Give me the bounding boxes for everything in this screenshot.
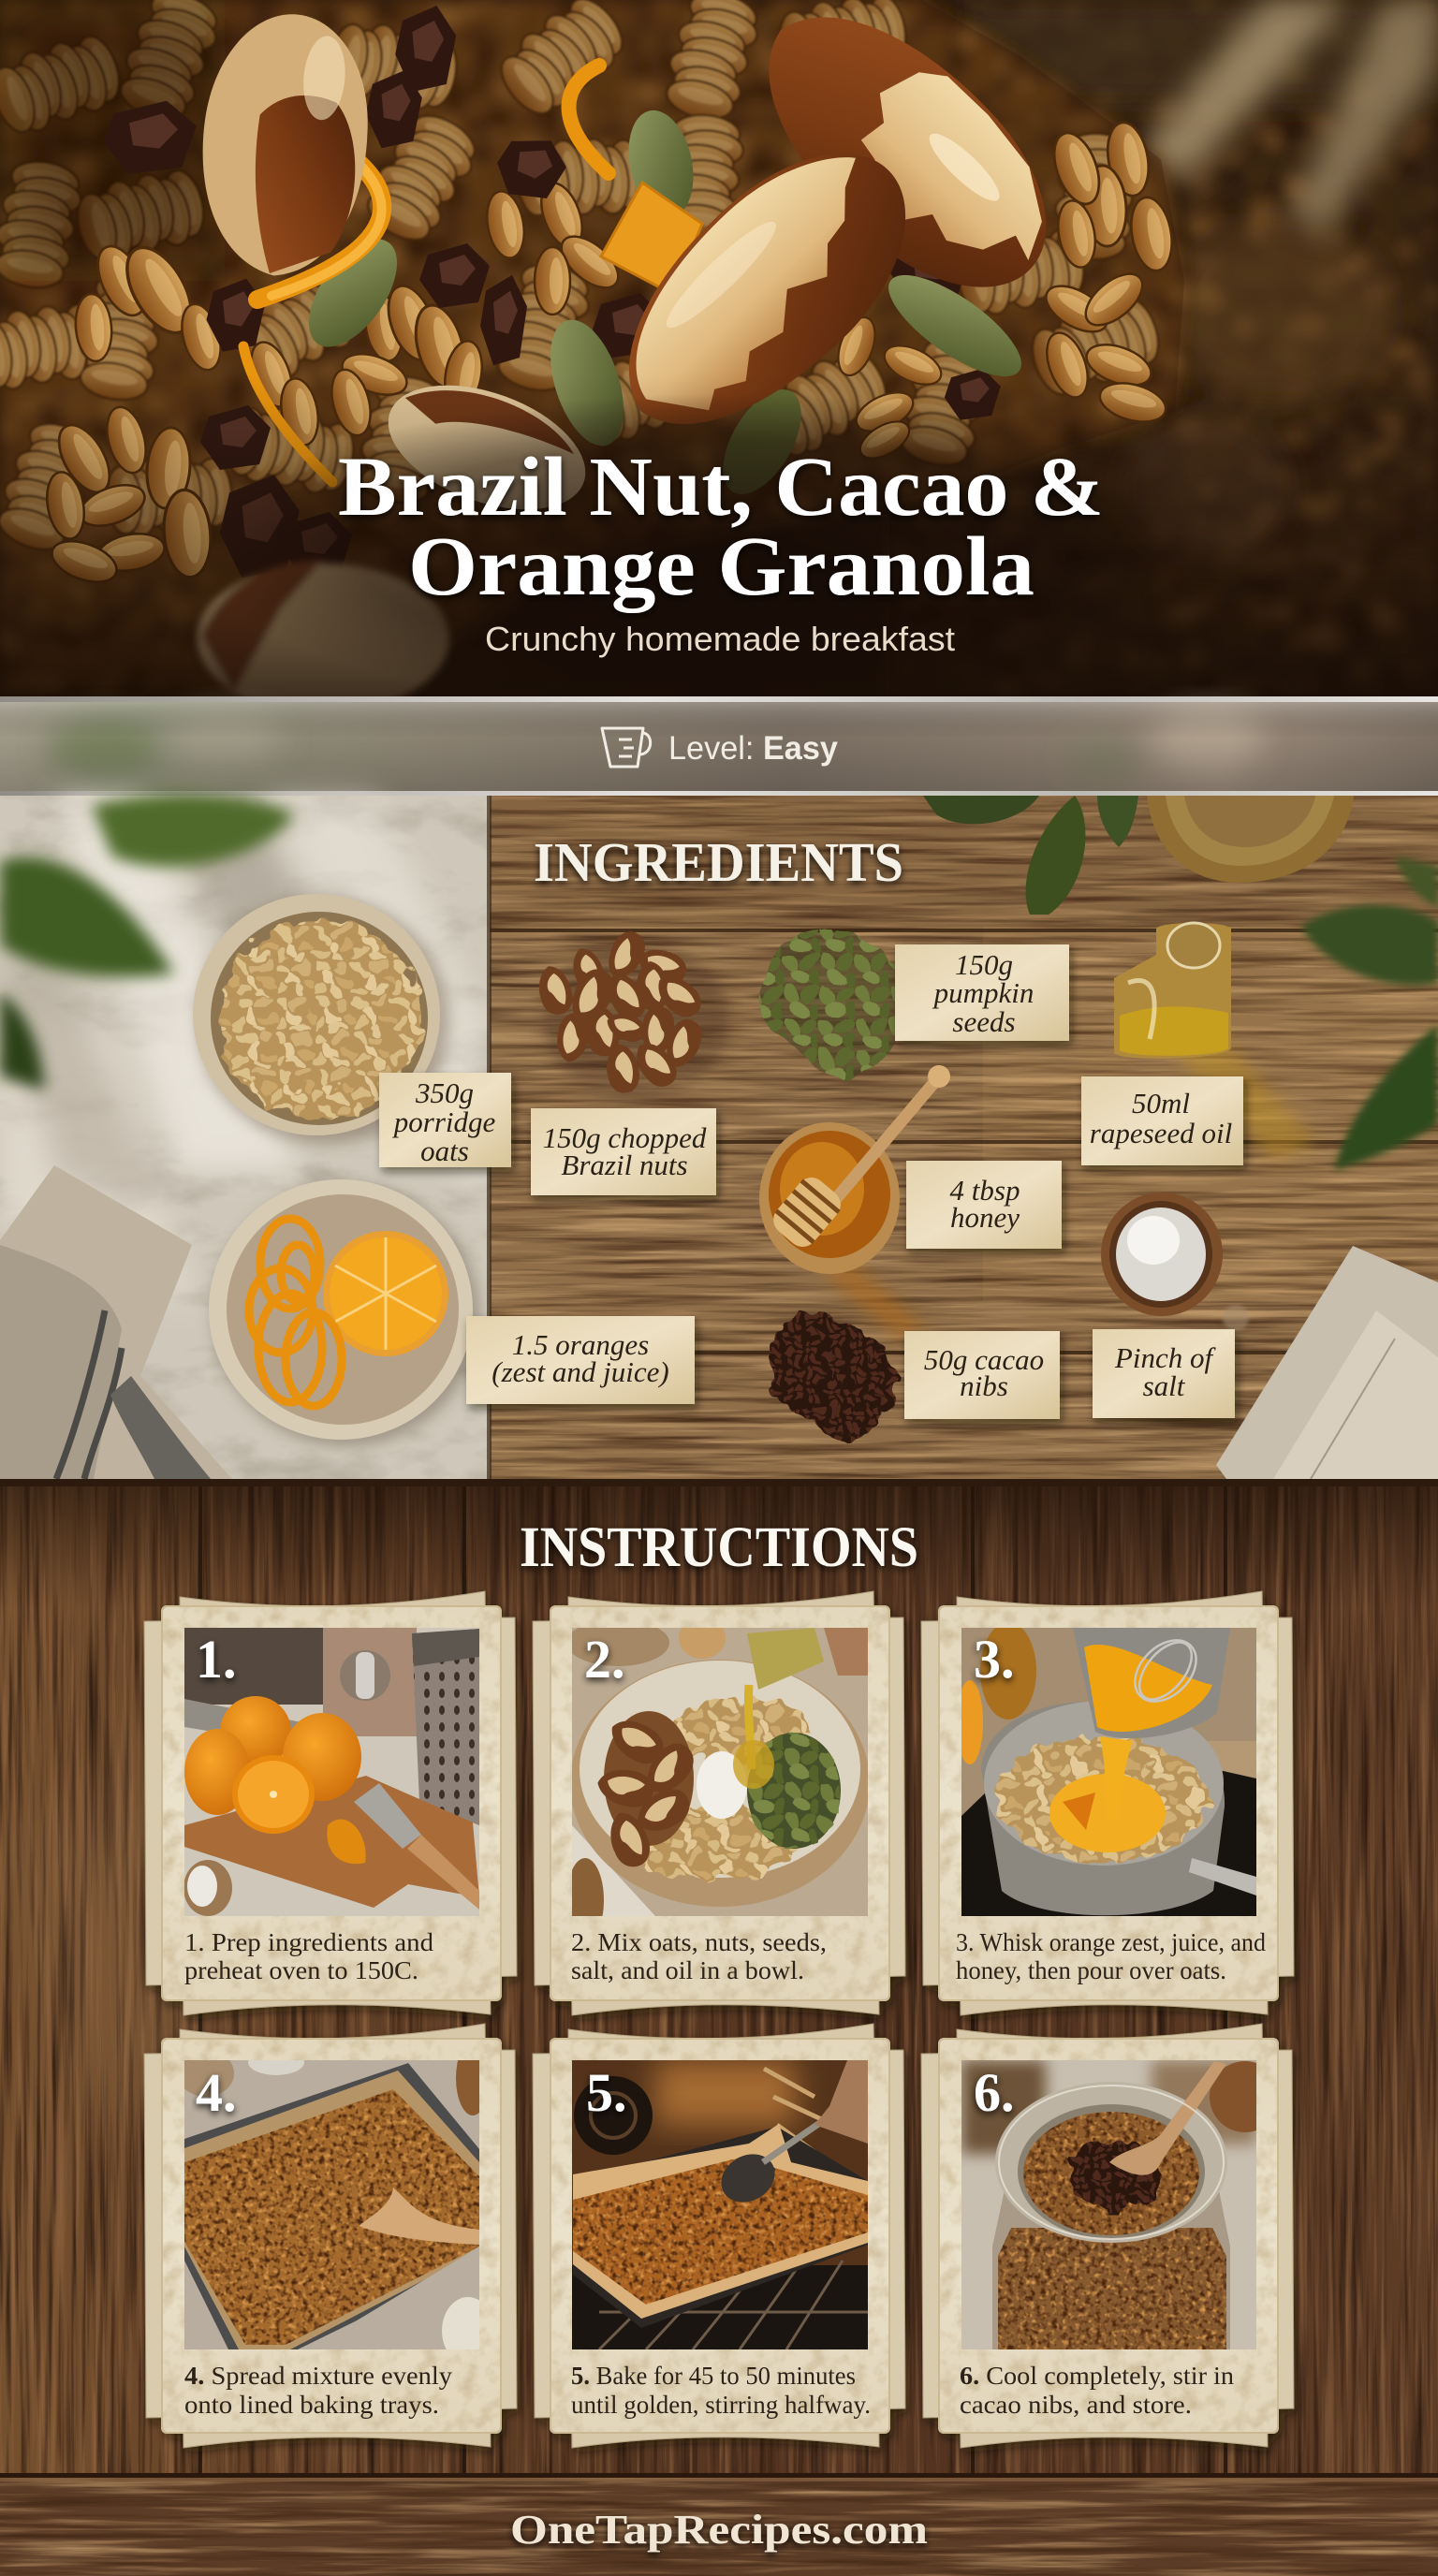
orange zest rings [249, 1219, 342, 1406]
pile of pumpkin seeds [760, 927, 908, 1078]
title: Orange Granola [408, 520, 1034, 613]
photo: saucepan and orange mixture [961, 1628, 1256, 1916]
caption 5: 5. Bake for 45 to 50 minutes [571, 2362, 856, 2390]
panel: ingredients [0, 795, 1438, 1479]
panel: hero photo [0, 0, 1438, 713]
blurred leaves, left [0, 795, 294, 1090]
label: oranges: (zest and juice) [492, 1355, 669, 1388]
bowl of orange and zest [209, 1179, 479, 1446]
large Brazil nut, left [192, 7, 377, 283]
wood background [0, 1479, 1438, 2475]
card: step 6: cacao nibs, and store. [960, 2391, 1192, 2419]
card: step 6 [921, 2024, 1294, 2448]
label: porridge oats: 350g [415, 1076, 474, 1109]
caption 6: 6. Cool completely, stir in [960, 2362, 1235, 2390]
caption 2: 2. Mix oats, nuts, seeds, [571, 1928, 827, 1956]
card: step 1: preheat oven to 150C. [184, 1956, 418, 1984]
caption 3: 3. Whisk orange zest, juice, and [956, 1928, 1266, 1956]
label: salt [1093, 1329, 1235, 1418]
label: pumpkin seeds: 150g [955, 948, 1013, 981]
linen towel, right [1216, 1246, 1438, 1479]
number 4: 4. [196, 2062, 236, 2123]
number 1: 1. [196, 1629, 236, 1690]
label: salt: Pinch of [1114, 1341, 1216, 1374]
honey dipper [768, 1065, 950, 1253]
pumpkin seeds [291, 104, 1035, 507]
number 6: 6. [974, 2062, 1015, 2123]
label: cacao nibs: 50g cacao [924, 1343, 1044, 1376]
bottle of rapeseed oil [1114, 923, 1315, 1161]
label: honey: 4 tbsp [950, 1174, 1020, 1207]
label: cacao nibs [904, 1331, 1060, 1419]
label: porridge oats: porridge [392, 1105, 495, 1138]
large Brazil nut, centre [580, 109, 950, 475]
title: Brazil Nut, Cacao & [338, 441, 1104, 534]
photo: baking tray [184, 2060, 479, 2349]
label: porridge oats: oats [420, 1134, 469, 1167]
caption 1: 1. Prep ingredients and [184, 1928, 434, 1956]
label: pumpkin seeds [895, 944, 1069, 1041]
card: step 2: salt, and oil in a bowl. [571, 1956, 804, 1984]
label: salt: salt [1143, 1369, 1186, 1402]
card: step 3 [921, 1591, 1294, 2015]
label: oranges [466, 1316, 695, 1404]
photo: jar of granola [961, 2060, 1256, 2349]
wood table [490, 796, 1438, 1479]
label: oranges: 1.5 oranges [512, 1328, 649, 1361]
subtitle: Crunchy homemade breakfast [485, 620, 955, 658]
label: Brazil nuts: 150g chopped [543, 1121, 707, 1154]
caption 4: 4. Spread mixture evenly [184, 2362, 453, 2390]
label: pumpkin seeds: seeds [952, 1005, 1016, 1038]
label: honey [906, 1161, 1062, 1249]
label: rapeseed oil: rapeseed oil [1090, 1117, 1232, 1149]
photo: mixing bowl [572, 1628, 868, 1916]
label: Brazil nuts [531, 1108, 716, 1195]
footer plank [0, 2473, 1438, 2576]
small Brazil nuts, bottom [197, 361, 602, 713]
jar of honey with dipper [759, 1065, 950, 1339]
photo: tray in oven [572, 2060, 868, 2349]
card: step 2 [533, 1591, 905, 2015]
number 3: 3. [974, 1629, 1015, 1690]
card: step 5: until golden, stirring halfway. [571, 2391, 871, 2419]
label: honey: honey [950, 1201, 1020, 1234]
level text: Level: Easy [668, 730, 839, 767]
card: step 4 [144, 2024, 517, 2448]
title [338, 441, 1104, 613]
card: step 3: honey, then pour over oats. [956, 1956, 1226, 1984]
label: porridge oats [379, 1073, 511, 1167]
icon: measuring jug [602, 728, 651, 767]
pile of Brazil nuts [534, 927, 730, 1100]
bowl of salt [1101, 1193, 1249, 1331]
in-focus granola mass [0, 0, 1184, 696]
number 5: 5. [586, 2062, 627, 2123]
label: pumpkin seeds: pumpkin [932, 976, 1034, 1009]
glass jar and leaves, top [923, 796, 1354, 915]
panel: level band [0, 696, 1438, 796]
packed oat stacks, background layer [0, 0, 1167, 559]
bowl of oats [193, 894, 449, 1144]
label: Brazil nuts: Brazil nuts [561, 1149, 688, 1181]
cacao nibs [103, 6, 1001, 578]
footer text: OneTapRecipes.com [510, 2507, 928, 2553]
card: step 4: onto lined baking trays. [184, 2391, 439, 2419]
granola oat clusters [42, 119, 1177, 590]
marble counter [0, 796, 490, 1479]
hero darkening gradient [0, 374, 1438, 696]
card: step 1 [144, 1591, 517, 2015]
linen towel, left [0, 1165, 232, 1479]
orange zest curls [243, 66, 609, 482]
heading: instructions: INSTRUCTIONS [520, 1516, 918, 1579]
pile of cacao nibs [768, 1312, 897, 1442]
orange slice [323, 1231, 448, 1356]
background: blurred granola bokeh [889, 0, 1438, 696]
label: rapeseed oil [1081, 1076, 1243, 1165]
candied orange piece [601, 183, 702, 295]
panel: instructions [0, 1479, 1438, 2475]
label: rapeseed oil: 50ml [1132, 1087, 1190, 1120]
blurred leaves, right [1301, 856, 1438, 1170]
card: step 5 [533, 2024, 905, 2448]
heading: ingredients: INGREDIENTS [534, 831, 903, 893]
photo: prep ingredients [184, 1628, 479, 1916]
number 2: 2. [584, 1629, 625, 1690]
label: cacao nibs: nibs [960, 1369, 1008, 1402]
ingredient labels [379, 944, 1243, 1419]
large Brazil nut, right [719, 0, 1091, 333]
